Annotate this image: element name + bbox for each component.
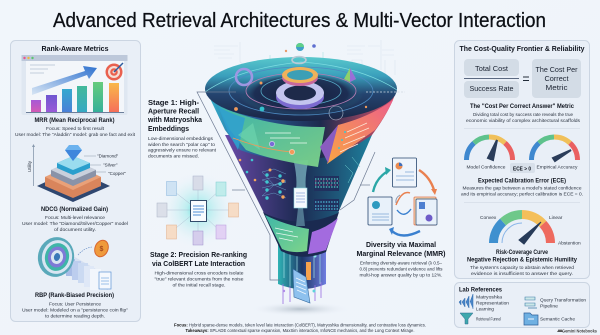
heading: cost-quality frontier: The Cost-Quality Frontier & Reliability bbox=[460, 44, 584, 53]
text: risk-coverage and abstention: Risk-Coverage Curve bbox=[496, 250, 549, 256]
text block: stage 2: Stage 2: Precision Re-ranking bbox=[150, 250, 247, 259]
text block: stage 2: of the initial recall stage. bbox=[172, 282, 226, 288]
metric: RBP text: User model: Modeled on a "persistence coin flip" bbox=[22, 308, 128, 314]
text block: stage 1: documents are missed. bbox=[148, 153, 199, 159]
text block: stage 1: Low-dimensional embeddings bbox=[148, 136, 214, 142]
text block: stage 1: Embeddings bbox=[148, 124, 189, 133]
text: risk-coverage and abstention: The system's capacity to abstain when retrieved bbox=[470, 265, 574, 271]
reference: matryoshka representation learning: Learning bbox=[476, 306, 494, 312]
labels: gauges and ECE badge: Empirical Accuracy bbox=[536, 164, 578, 170]
formula: cost per correct metric: Correct bbox=[544, 76, 569, 83]
reference: query transformation pipeline bbox=[525, 297, 586, 310]
reference: matryoshka representation learning: Matryoshka bbox=[476, 294, 502, 300]
footer: focus and takeaways bbox=[174, 322, 426, 333]
heading: rank-aware metrics: Rank-Aware Metrics bbox=[42, 44, 109, 53]
text block: stage 2: High-dimensional cross encoders isolate bbox=[154, 270, 244, 276]
text block: stage 1: Stage 1: High- bbox=[148, 98, 200, 107]
metric: RBP text: Focus: User Persistence bbox=[49, 302, 101, 308]
labels: gauges and ECE badge: ECE > 0 bbox=[513, 166, 531, 172]
metric: NDCG text: User model: The "Diamond/Silver/Copper" model bbox=[22, 221, 128, 227]
text: cost per correct answer: economic viability of complex architectural scaffolds bbox=[466, 118, 581, 124]
text block: stage 2 bbox=[150, 250, 247, 288]
formula: cost per correct metric: Total Cost bbox=[475, 66, 508, 73]
text block: stage 1: widen the search "polar cap" to bbox=[148, 142, 215, 148]
metric: MRR text: User model: The "Aladdin" model: grab one fact and exit bbox=[15, 132, 136, 138]
gauge: empirical accuracy bbox=[532, 137, 578, 161]
panel: rank-aware metrics bbox=[10, 40, 140, 322]
labels: gauges and ECE badge bbox=[466, 163, 578, 173]
funnel: lower band panels bbox=[263, 212, 339, 257]
panel: cost-quality frontier and reliability bbox=[454, 40, 590, 278]
text: expected calibration error: and its empirical accuracy; perfect calibration is ECE = 0. bbox=[461, 192, 583, 198]
illustration: stage 2 document cluster bbox=[157, 172, 238, 248]
labels: gauges and ECE badge: Model Confidence bbox=[466, 164, 506, 170]
text block: stage 1 bbox=[147, 98, 217, 159]
text block: diversity via MMR: 0.8) prevents redundant evidence and lifts bbox=[360, 266, 443, 272]
formula: cost per correct metric: The Cost Per bbox=[536, 67, 578, 74]
text block: stage 1: with Matryoshka bbox=[147, 115, 203, 124]
reference: matryoshka representation learning bbox=[459, 294, 509, 312]
text block: stage 2: via ColBERT Late Interaction bbox=[152, 259, 245, 268]
text block: diversity via MMR bbox=[356, 240, 446, 278]
text: risk-coverage and abstention bbox=[467, 250, 578, 277]
title: Advanced Retrieval Architectures & Multi-Vector Interaction bbox=[53, 9, 546, 32]
text block: diversity via MMR: multi-hop answer quality by up to 12%. bbox=[360, 272, 442, 278]
funnel: upper wall panels bbox=[205, 88, 397, 167]
gauge: risk-coverage curve: Convex bbox=[480, 215, 497, 221]
reference: query transformation pipeline: Query Transformation bbox=[540, 298, 586, 304]
text block: stage 2: "true" relevant documents from the noise bbox=[154, 276, 244, 282]
metric: NDCG text bbox=[22, 207, 128, 233]
gauge: risk-coverage curve: Abstention bbox=[558, 240, 581, 246]
callout lines: stages to funnel bbox=[197, 92, 405, 280]
text: expected calibration error bbox=[461, 178, 583, 198]
metric: MRR text: MRR (Mean Reciprocal Rank) bbox=[34, 118, 114, 124]
funnel: network and matrix tier bbox=[225, 135, 372, 226]
metric: NDCG text: of document utility. bbox=[54, 227, 96, 233]
text block: diversity via MMR: Enforcing diversity-aware retrieval (λ 0.5– bbox=[360, 260, 442, 266]
metric: MRR text: Focus: Speed to first result bbox=[46, 126, 105, 132]
text: cost per correct answer: The "Cost Per Correct Answer" Metric bbox=[470, 104, 575, 110]
chart: NDCG pyramid: "Silver" bbox=[103, 162, 118, 168]
text: expected calibration error: Measures the gap between a model's stated confidence bbox=[462, 186, 582, 192]
metric: RBP text bbox=[22, 293, 128, 320]
text block: stage 1: aggressively ensure no relevant bbox=[148, 148, 217, 154]
icon: RBP rings, document stack and coin bbox=[34, 233, 111, 290]
footer: focus and takeaways: Takeaways: SPLADE contextual sparse expansion, MaxSim interaction, InfoNCE mechanics, and the Long Context Mirage. bbox=[186, 328, 414, 333]
text: expected calibration error: Expected Calibration Error (ECE) bbox=[478, 178, 566, 184]
formula: cost per correct metric: Success Rate bbox=[470, 86, 514, 93]
formula: cost per correct metric: Metric bbox=[546, 85, 568, 92]
heading: lab references: Lab References bbox=[459, 288, 503, 294]
gauge: risk-coverage curve bbox=[480, 214, 581, 246]
chart: NDCG pyramid: Utility bbox=[27, 160, 32, 172]
formula: cost per correct metric bbox=[464, 59, 581, 98]
text: cost per correct answer bbox=[466, 104, 581, 124]
chart: MRR bars with arrow and target bbox=[22, 55, 128, 115]
chart: NDCG pyramid: "Copper" bbox=[108, 171, 126, 176]
metric: MRR text bbox=[15, 118, 136, 138]
text: risk-coverage and abstention: evidence is insufficient to answer the query. bbox=[471, 271, 573, 277]
funnel: cylinder stem bbox=[278, 240, 326, 304]
panel: lab references bbox=[454, 282, 590, 328]
funnel: top opening bbox=[205, 43, 397, 121]
chart: NDCG pyramid bbox=[27, 144, 126, 202]
metric: NDCG text: Focus: Multi-level relevance bbox=[45, 215, 105, 221]
chart: NDCG pyramid: "Diamond" bbox=[97, 154, 119, 158]
gauge: risk-coverage curve: Linear bbox=[549, 215, 563, 221]
badge: gemini notebooks: Gemini Notebooks bbox=[562, 328, 598, 334]
icon: RBP rings, document stack and coin: $ bbox=[100, 246, 104, 253]
reference: matryoshka representation learning: Representation bbox=[476, 300, 509, 306]
metric: NDCG text: NDCG (Normalized Gain) bbox=[41, 207, 108, 213]
reference: query transformation pipeline: Pipeline bbox=[540, 304, 558, 310]
reference: semantic cache: Semantic Cache bbox=[540, 316, 575, 322]
illustration: diversity cycle bbox=[368, 158, 437, 236]
text: cost per correct answer: Dividing total cost by success rate reveals the true bbox=[473, 112, 573, 118]
footer: focus and takeaways: Focus: Hybrid sparse-dense models, token level late interaction (ColBERT), Matryoshka dimensionality, and contrastive loss dynamics. bbox=[174, 322, 426, 328]
illustration: retrieval funnel bbox=[205, 40, 397, 316]
text block: diversity via MMR: Diversity via Maximal bbox=[366, 240, 436, 249]
text block: stage 1: Aperture Recall bbox=[148, 106, 199, 116]
text block: diversity via MMR: Marginal Relevance (MMR) bbox=[356, 249, 446, 258]
metric: RBP text: to determine reading depth. bbox=[45, 314, 105, 320]
text: risk-coverage and abstention: Negative Rejection & Epistemic Humility bbox=[467, 258, 578, 264]
metric: RBP text: RBP (Rank-Biased Precision) bbox=[35, 293, 114, 299]
gauge: model confidence bbox=[466, 137, 512, 160]
reference: retrieval funnel: Retrieval Funnel bbox=[476, 316, 501, 322]
